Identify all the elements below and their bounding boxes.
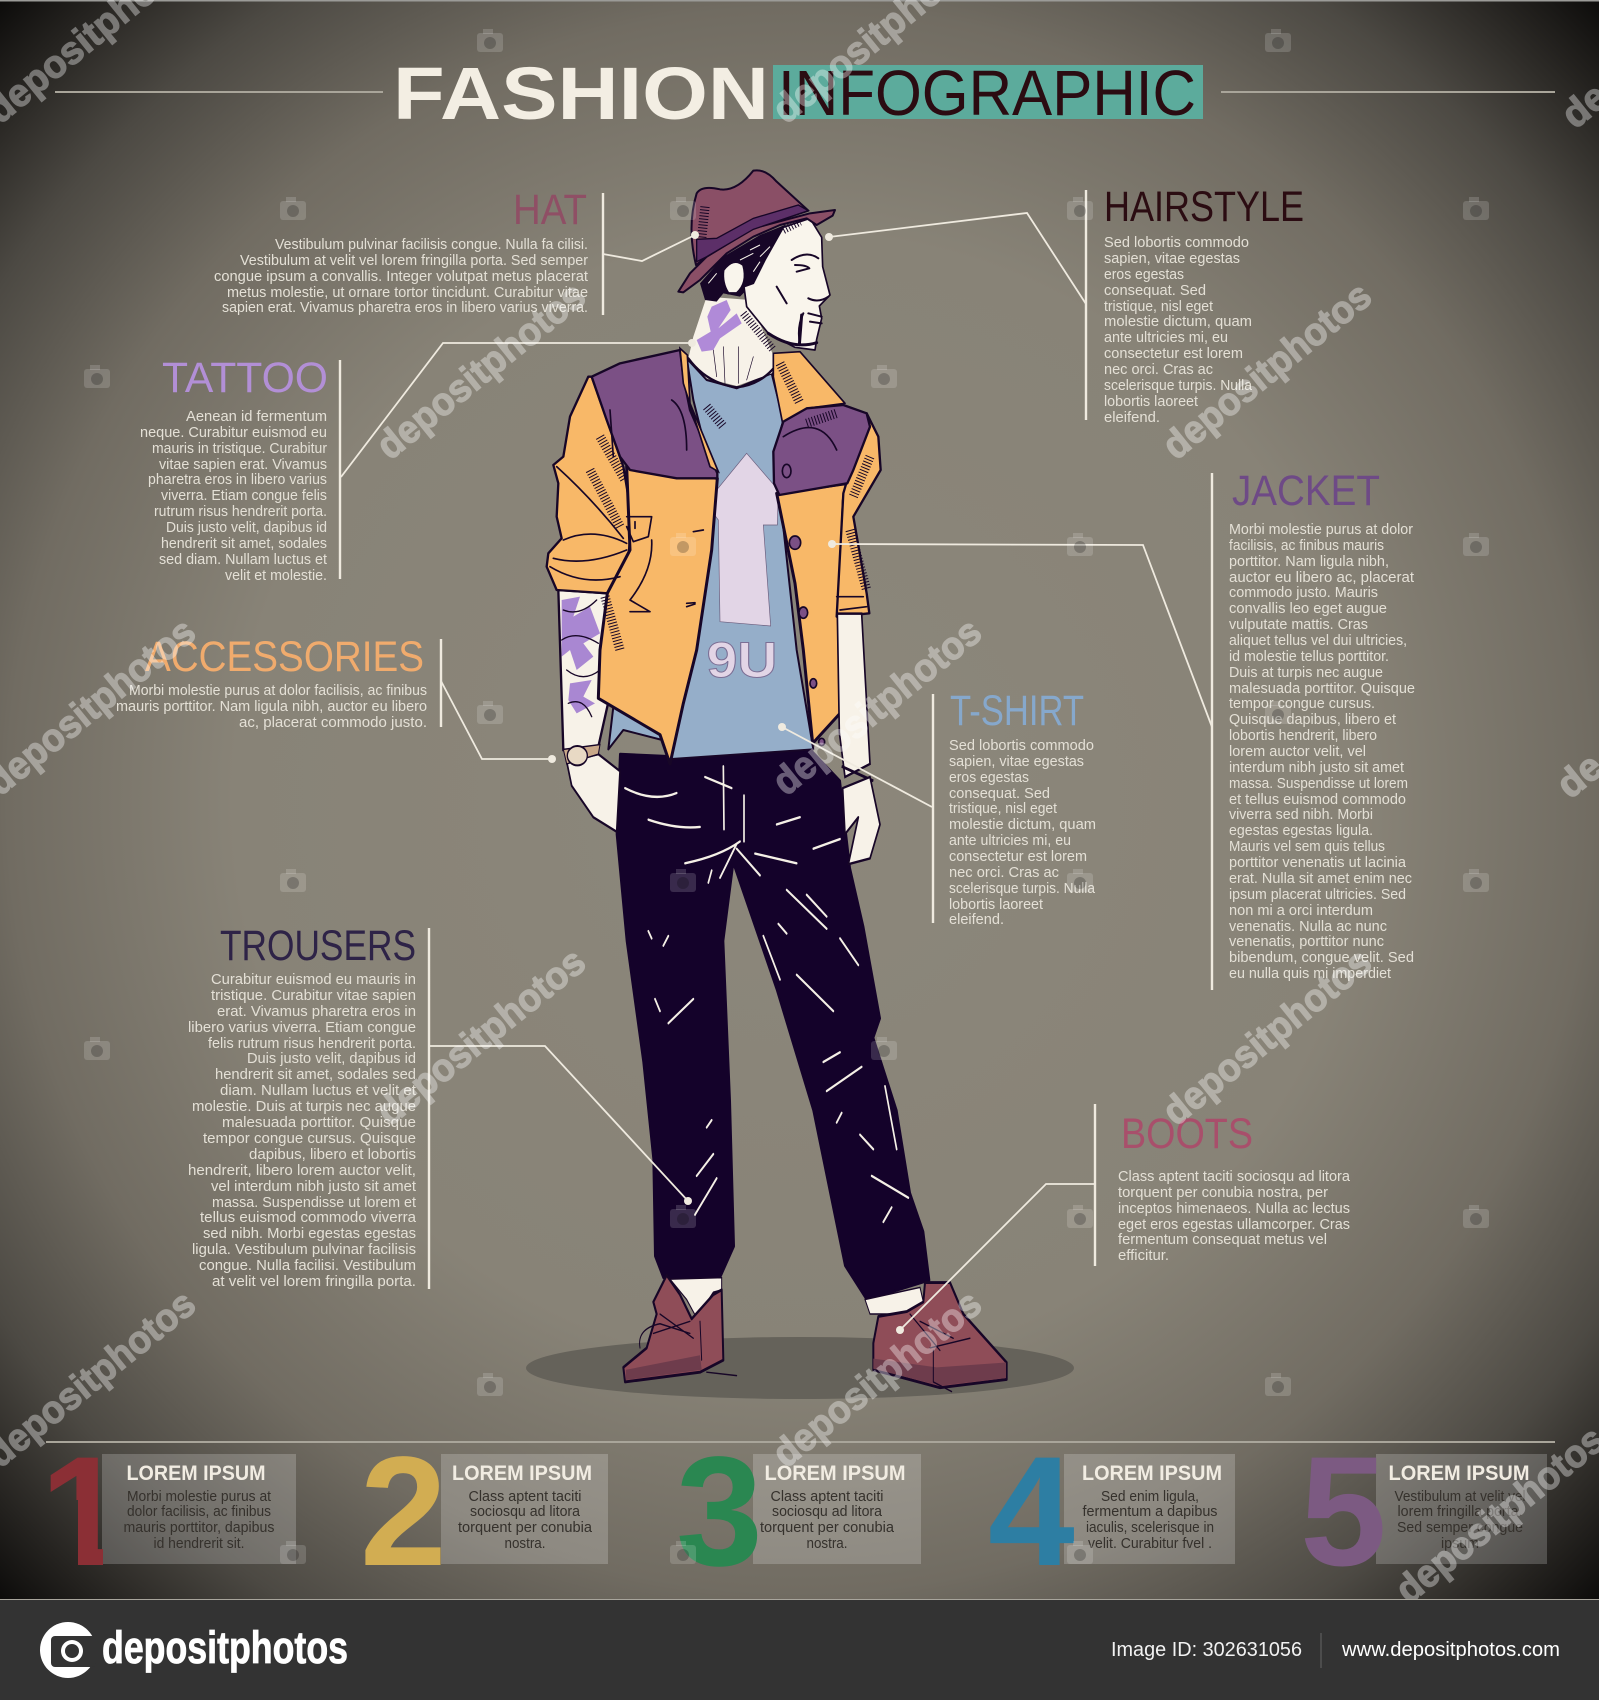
text: trousers: malesuada porttitor. Quisque <box>222 1115 416 1131</box>
t-shirt <box>608 358 813 759</box>
step 1 <box>50 1454 296 1565</box>
text: jacket: bibendum, congue velit. Sed <box>1229 950 1414 966</box>
step 1 text <box>124 1489 274 1552</box>
text: boots: eget eros egestas ullamcorper. Cras <box>1118 1217 1350 1233</box>
text: hairstyle: sapien, vitae egestas <box>1104 251 1240 267</box>
text: hat: sapien erat. Vivamus pharetra eros in libero varius viverra. <box>222 300 588 316</box>
figure: lower body <box>617 749 1007 1392</box>
step 2 text: nostra. <box>504 1536 546 1552</box>
text: tattoo: rutrum risus hendrerit porta. <box>154 504 327 520</box>
panel: accessories <box>116 633 556 763</box>
panel: hat <box>214 186 699 316</box>
text: t-shirt: scelerisque turpis. Nulla <box>949 881 1096 897</box>
text: jacket: Morbi molestie purus at dolor <box>1229 522 1413 538</box>
step 3 text <box>760 1489 895 1552</box>
connector: hat <box>603 231 699 261</box>
panel: jacket <box>828 467 1415 990</box>
step 2 <box>360 1425 608 1599</box>
text: jacket: viverra sed nibh. Morbi <box>1229 807 1373 823</box>
text: t-shirt: sapien, vitae egestas <box>949 754 1084 770</box>
text: trousers: tempor congue cursus. Quisque <box>203 1131 416 1147</box>
jacket: right sleeve <box>837 413 881 617</box>
step 2 heading: LOREM IPSUM <box>452 1462 592 1485</box>
text: t-shirt: lobortis laoreet <box>949 897 1043 913</box>
step 1 text: dolor facilisis, ac finibus <box>127 1504 271 1520</box>
t-shirt: lettering: 9U <box>707 632 777 688</box>
beard <box>768 315 817 345</box>
text: tattoo: neque. Curabitur euismod eu <box>140 425 327 441</box>
watermark camera icons <box>84 29 1489 1564</box>
jacket: left panel <box>598 467 717 764</box>
text: accessories: mauris porttitor. Nam ligula nibh, auctor eu libero <box>116 699 427 715</box>
text: trousers: massa. Suspendisse ut lorem et <box>212 1195 416 1211</box>
heading: boots: BOOTS <box>1121 1110 1253 1158</box>
right forearm <box>837 614 870 777</box>
connector: jacket <box>828 540 1212 727</box>
footer bar <box>0 1599 1599 1700</box>
text: jacket: et tellus euismod commodo <box>1229 792 1406 808</box>
text: trousers: molestie. Duis at turpis nec augue <box>192 1099 416 1115</box>
jacket: left sleeve <box>547 377 632 593</box>
text: tattoo: pharetra eros in libero varius <box>148 472 327 488</box>
tattoo on neck <box>697 300 742 352</box>
heading: trousers: TROUSERS <box>220 922 416 970</box>
number 3: 3 <box>676 1425 763 1599</box>
watermarks: depositphotos <box>1155 274 1380 468</box>
image id: Image ID: 302631056 <box>1111 1639 1302 1661</box>
text: hairstyle: lobortis laoreet <box>1104 394 1198 410</box>
text: jacket: porttitor. Nam ligula nibh, <box>1229 554 1389 570</box>
text: hairstyle: eros egestas <box>1104 267 1184 283</box>
text: jacket: lobortis hendrerit, libero <box>1229 728 1377 744</box>
step 3 heading: LOREM IPSUM <box>764 1462 906 1485</box>
boot: left <box>623 1275 737 1382</box>
icon: camera logo <box>40 1622 96 1678</box>
text: trousers: hendrerit, libero lorem auctor velit, <box>188 1163 416 1179</box>
text: trousers: Duis justo velit, dapibus id <box>247 1051 416 1067</box>
step 4 <box>988 1425 1235 1599</box>
text: hat: Vestibulum at velit vel lorem fringilla porta. Sed semper <box>240 253 588 269</box>
step 5 heading: LOREM IPSUM <box>1388 1462 1530 1485</box>
text: hairstyle: scelerisque turpis. Nulla <box>1104 378 1253 394</box>
panel: tattoo <box>140 339 696 584</box>
jacket: right collar <box>773 352 845 427</box>
watermarks: depositphotos <box>1155 940 1380 1134</box>
watermarks: depositphotos <box>369 274 594 468</box>
title <box>55 52 1555 135</box>
text: tattoo: Duis justo velit, dapibus id <box>166 520 327 536</box>
sock: right <box>865 1287 923 1314</box>
step 2 text: Class aptent taciti <box>468 1489 582 1505</box>
text: jacket: interdum nibh justo sit amet <box>1229 760 1404 776</box>
face <box>744 218 830 350</box>
text: t-shirt <box>949 738 1096 928</box>
step 3 text: torquent per conubia <box>760 1520 895 1536</box>
step 5 text: lorem fringilla porta. <box>1398 1504 1522 1520</box>
text: trousers: libero varius viverra. Etiam congue <box>188 1020 416 1036</box>
step 2 text: torquent per conubia <box>458 1520 593 1536</box>
jacket: right panel <box>777 483 848 743</box>
text: t-shirt: Sed lobortis commodo <box>949 738 1094 754</box>
text: trousers <box>188 972 417 1290</box>
text: hairstyle: nec orci. Cras ac <box>1104 362 1213 378</box>
jaw hatching <box>743 222 800 350</box>
text: hairstyle <box>1104 235 1253 426</box>
text: jacket: erat. Nulla sit amet enim nec <box>1229 871 1412 887</box>
jacket: left yoke <box>592 350 717 478</box>
step 2 text <box>458 1489 593 1552</box>
hair flecks <box>708 245 770 283</box>
step 3 text: Class aptent taciti <box>770 1489 884 1505</box>
heading: accessories: ACCESSORIES <box>145 633 424 681</box>
hair back <box>700 225 785 302</box>
jacket <box>547 348 881 764</box>
text: tattoo: Aenean id fermentum <box>186 409 327 425</box>
text: t-shirt: eleifend. <box>949 912 1004 928</box>
text: jacket: commodo justo. Mauris <box>1229 585 1378 601</box>
jacket: hatching <box>590 363 870 650</box>
hat brim <box>678 210 835 292</box>
right hand <box>843 777 880 864</box>
text: boots: fermentum consequat metus vel <box>1118 1232 1327 1248</box>
jacket: right yoke <box>773 405 870 495</box>
text: boots: inceptos himenaeos. Nulla ac lectus <box>1118 1201 1350 1217</box>
text: jacket: lorem auctor velit, vel <box>1229 744 1366 760</box>
text: trousers: erat. Vivamus pharetra eros in <box>217 1004 416 1020</box>
step 5 text: Vestibulum at velit vel <box>1394 1489 1526 1505</box>
text: hairstyle: molestie dictum, quam <box>1104 314 1252 330</box>
connector: accessories <box>441 681 556 763</box>
text: tattoo <box>140 409 327 584</box>
text: trousers: diam. Nullam luctus et velit et <box>220 1083 416 1099</box>
text: jacket: Mauris vel sem quis tellus <box>1229 839 1385 855</box>
text: trousers: at velit vel lorem fringilla porta. <box>212 1274 416 1290</box>
text: jacket: vulputate mattis. Cras <box>1229 617 1368 633</box>
connector: trousers <box>430 1046 692 1205</box>
text: accessories <box>116 683 427 731</box>
step 5 <box>1300 1425 1547 1599</box>
logo wordmark: depositphotos <box>102 1622 348 1673</box>
text: t-shirt: molestie dictum, quam <box>949 817 1096 833</box>
step 3 text: nostra. <box>806 1536 848 1552</box>
text: t-shirt: nec orci. Cras ac <box>949 865 1059 881</box>
text: jacket: eu nulla quis mi imperdiet <box>1229 966 1391 982</box>
panel: t-shirt <box>778 687 1096 928</box>
arm: tattooed forearm <box>558 590 620 750</box>
hat crown <box>691 170 808 265</box>
text: jacket: porttitor venenatis ut lacinia <box>1229 855 1407 871</box>
text: jacket: venenatis, porttitor nunc <box>1229 934 1384 950</box>
text: t-shirt: consectetur est lorem <box>949 849 1087 865</box>
boot: right <box>873 1283 1007 1392</box>
heading: hat: HAT <box>513 186 587 234</box>
heading: t-shirt: T-SHIRT <box>950 687 1084 735</box>
text: jacket: Duis at turpis nec augue <box>1229 665 1383 681</box>
text: trousers: hendrerit sit amet, sodales sed <box>215 1067 416 1083</box>
text: jacket: id molestie tellus porttitor. <box>1229 649 1389 665</box>
watermarks: depositphotos <box>765 610 990 804</box>
neck <box>688 297 777 386</box>
panel: boots <box>896 1104 1351 1334</box>
text: trousers: tellus euismod commodo viverra <box>200 1210 417 1226</box>
number 1: 1 <box>40 1425 127 1599</box>
text: trousers: sed nibh. Morbi egestas egestas <box>203 1226 416 1242</box>
text: hairstyle: eleifend. <box>1104 410 1160 426</box>
text: jacket: tempor congue cursus. <box>1229 696 1375 712</box>
text: jacket: convallis leo eget augue <box>1229 601 1387 617</box>
panel: trousers <box>188 922 692 1290</box>
text: tattoo: hendrerit sit amet, sodales <box>161 536 327 552</box>
hat details <box>702 207 705 238</box>
connector: tattoo <box>341 339 696 477</box>
text: accessories: ac, placerat commodo justo. <box>239 715 427 731</box>
shadow under figure <box>526 1337 1074 1399</box>
text: hat <box>214 237 588 316</box>
website: www.depositphotos.com <box>1341 1639 1560 1661</box>
step 4 text: iaculis, scelerisque in <box>1086 1520 1214 1536</box>
text: jacket: malesuada porttitor. Quisque <box>1229 681 1415 697</box>
t-shirt: arrow graphic <box>713 453 778 626</box>
step 5 text: ipsum <box>1441 1536 1479 1552</box>
heading: hairstyle: HAIRSTYLE <box>1104 183 1304 231</box>
text: trousers: Curabitur euismod eu mauris in <box>211 972 416 988</box>
text: hairstyle: ante ultricies mi, eu <box>1104 330 1228 346</box>
text: accessories: Morbi molestie purus at dolor facilisis, ac finibus <box>129 683 427 699</box>
bracelet <box>842 766 873 781</box>
connector: hairstyle <box>825 213 1086 304</box>
step 4 text: Sed enim ligula, <box>1101 1489 1199 1505</box>
jacket: ink details <box>550 400 867 612</box>
text: trousers: felis rutrum risus hendrerit porta. <box>208 1036 416 1052</box>
step 2 text: sociosqu ad litora <box>470 1504 581 1520</box>
text: jacket: massa. Suspendisse ut lorem <box>1229 776 1408 792</box>
number 5: 5 <box>1300 1425 1387 1599</box>
connector: t-shirt <box>778 723 932 807</box>
step 5 text: Sed semper congue <box>1397 1520 1523 1536</box>
text: hat: Vestibulum pulvinar facilisis congue. Nulla fa cilisi. <box>275 237 588 253</box>
figure: hands <box>563 614 880 864</box>
text: jacket: ipsum placerat ultricies. Sed <box>1229 887 1406 903</box>
text: jacket: aliquet tellus vel dui ultricies, <box>1229 633 1407 649</box>
title: FASHION <box>393 52 769 135</box>
step 5 text <box>1394 1489 1526 1552</box>
text: boots: torquent per conubia nostra, per <box>1118 1185 1328 1201</box>
number 4: 4 <box>988 1425 1075 1599</box>
text: jacket <box>1229 522 1415 982</box>
text: boots: Class aptent taciti sociosqu ad litora <box>1118 1169 1351 1185</box>
text: hat: metus molestie, ut ornare tortor tincidunt. Curabitur vitae <box>227 285 588 301</box>
number 2: 2 <box>360 1425 447 1599</box>
text: jacket: Quisque dapibus, libero et <box>1229 712 1396 728</box>
text: boots <box>1118 1169 1351 1264</box>
hat band <box>697 205 808 262</box>
face details <box>777 255 828 345</box>
text: trousers: vel interdum nibh justo sit amet <box>211 1179 416 1195</box>
step 4 text: fermentum a dapibus <box>1082 1504 1218 1520</box>
text: t-shirt: eros egestas <box>949 770 1029 786</box>
heading: jacket: JACKET <box>1232 467 1380 515</box>
figure: upper body <box>547 170 881 764</box>
text: hat: congue ipsum a convallis. Integer volutpat metus placerat <box>214 269 588 285</box>
text: jacket: facilisis, ac finibus mauris <box>1229 538 1384 554</box>
text: jacket: egestas egestas ligula. <box>1229 823 1373 839</box>
text: jacket: auctor eu libero ac, placerat <box>1229 570 1414 586</box>
step 4 text <box>1082 1489 1218 1552</box>
text: hairstyle: consequat. Sed <box>1104 283 1206 299</box>
text: hairstyle: tristique, nisl eget <box>1104 299 1213 315</box>
ear <box>723 262 745 293</box>
text: t-shirt: tristique, nisl eget <box>949 801 1057 817</box>
connector: boots <box>896 1184 1095 1334</box>
title: INFOGRAPHIC <box>778 57 1196 129</box>
step 1 text: mauris porttitor, dapibus <box>124 1520 274 1536</box>
heading: tattoo: TATTOO <box>162 354 328 402</box>
step 4 text: velit. Curabitur fvel . <box>1088 1536 1212 1552</box>
step 1 heading: LOREM IPSUM <box>126 1462 266 1485</box>
jacket: left collar <box>680 348 718 472</box>
left hand <box>567 754 620 832</box>
text: trousers: congue. Nulla facilisi. Vestibulum <box>199 1258 416 1274</box>
step 3 <box>676 1425 921 1599</box>
text: t-shirt: ante ultricies mi, eu <box>949 833 1071 849</box>
text: trousers: dapibus, libero et lobortis <box>249 1147 416 1163</box>
text: trousers: tristique. Curabitur vitae sapien <box>211 988 416 1004</box>
watch <box>563 745 600 765</box>
text: tattoo: viverra. Etiam congue felis <box>161 488 327 504</box>
sock: left <box>670 1278 722 1318</box>
panel: hairstyle <box>825 183 1304 426</box>
watermarks: depositphotos <box>765 1282 990 1476</box>
jacket: buttons <box>782 464 825 746</box>
text: jacket: venenatis. Nulla ac nunc <box>1229 919 1387 935</box>
step 3 text: sociosqu ad litora <box>772 1504 883 1520</box>
text: boots: efficitur. <box>1118 1248 1169 1264</box>
text: t-shirt: consequat. Sed <box>949 786 1050 802</box>
text: jacket: non mi a orci interdum <box>1229 903 1373 919</box>
watermarks: depositphotos <box>369 940 594 1134</box>
text: trousers: ligula. Vestibulum pulvinar facilisis <box>192 1242 416 1258</box>
text: hairstyle: Sed lobortis commodo <box>1104 235 1249 251</box>
text: hairstyle: consectetur est lorem <box>1104 346 1243 362</box>
text: tattoo: vitae sapien erat. Vivamus <box>159 457 327 473</box>
text: tattoo: velit et molestie. <box>225 568 327 584</box>
step 1 text: id hendrerit sit. <box>154 1536 244 1552</box>
step 4 heading: LOREM IPSUM <box>1082 1462 1222 1485</box>
head <box>678 170 835 350</box>
trousers <box>617 749 929 1299</box>
text: tattoo: sed diam. Nullam luctus et <box>159 552 327 568</box>
step 1 text: Morbi molestie purus at <box>127 1489 271 1505</box>
text: tattoo: mauris in tristique. Curabitur <box>152 441 327 457</box>
